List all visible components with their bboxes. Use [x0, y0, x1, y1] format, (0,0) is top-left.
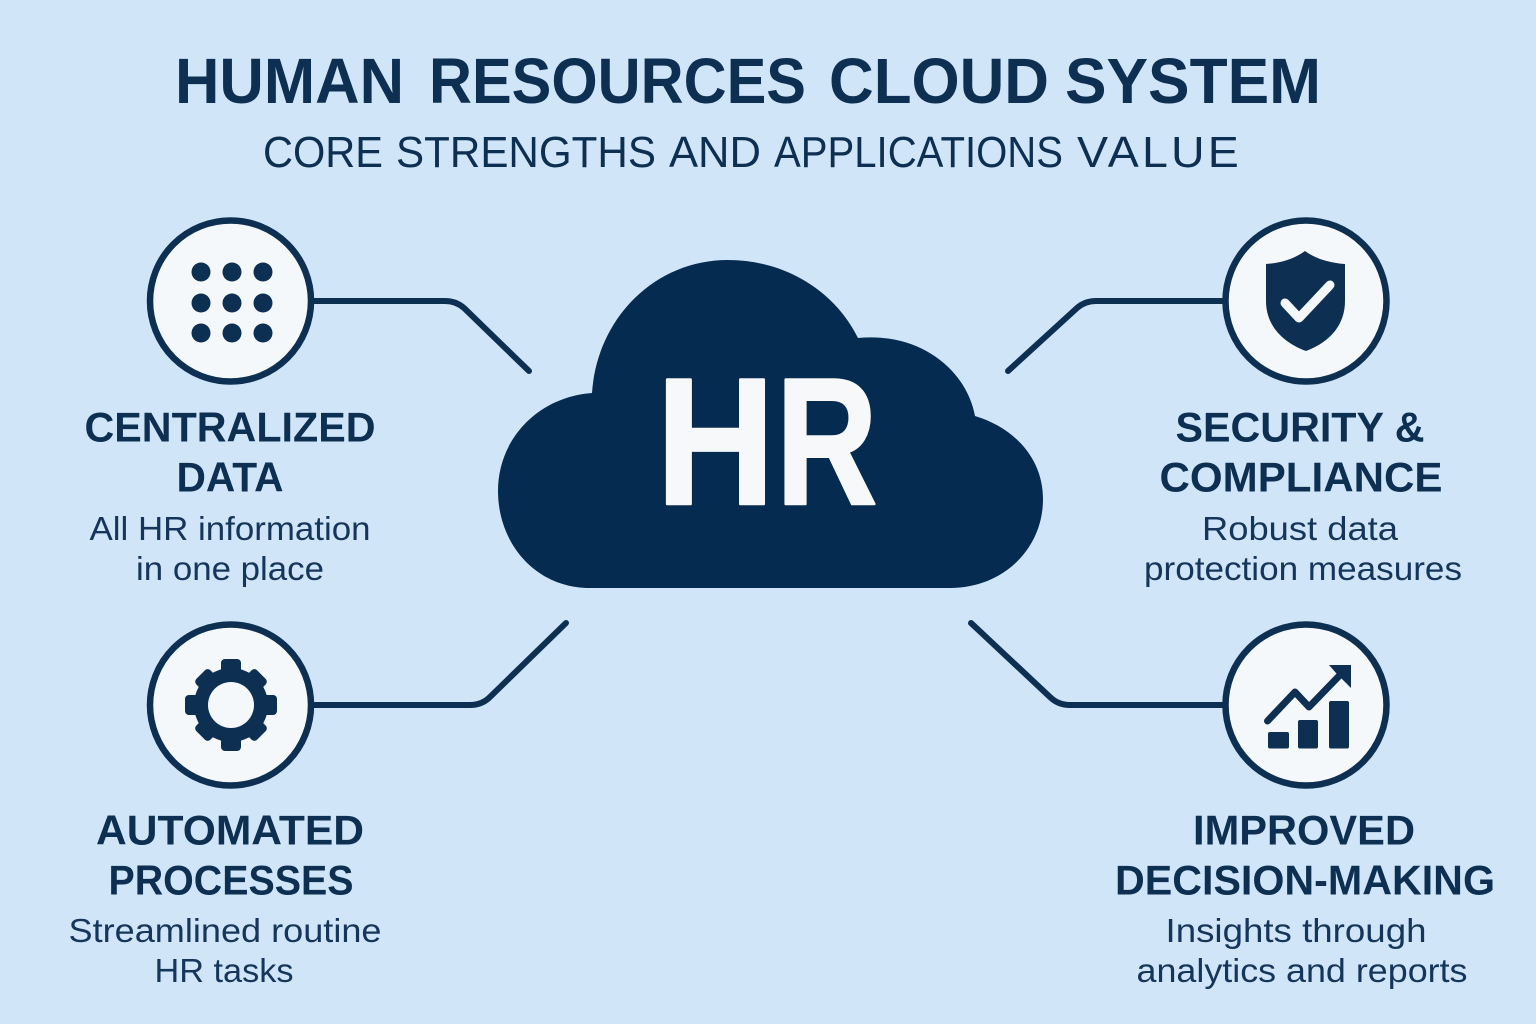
subtitle: APPLICATIONS: [774, 128, 1063, 177]
text: automated processes: HR tasks: [154, 953, 294, 990]
connector: automated: [312, 623, 566, 705]
title: CLOUD: [829, 45, 1049, 117]
text: improved decision-making: IMPROVED: [1193, 806, 1415, 854]
subtitle: CORE: [263, 128, 383, 177]
text: automated processes: Streamlined routine: [68, 913, 382, 950]
text: improved decision-making: Insights through: [1166, 913, 1426, 950]
text: automated processes: AUTOMATED: [96, 806, 364, 854]
text: automated processes: [68, 806, 382, 990]
cloud label: H: [656, 341, 775, 543]
cloud label: R: [776, 341, 878, 543]
subtitle: AND: [669, 128, 761, 177]
text: security and compliance: COMPLIANCE: [1160, 454, 1442, 500]
text: improved decision-making: [1115, 806, 1495, 990]
text: centralized data: CENTRALIZED: [84, 404, 376, 450]
text: security and compliance: protection measures: [1144, 551, 1462, 588]
icon: gear: [150, 624, 311, 786]
text: improved decision-making: DECISION-MAKING: [1115, 856, 1495, 904]
connector: decision making: [971, 623, 1224, 705]
text: centralized data: [84, 404, 376, 588]
icon: data grid: [150, 220, 311, 382]
icon: security shield: [1226, 220, 1386, 382]
text: centralized data: DATA: [176, 454, 284, 500]
connector: centralized data: [312, 301, 529, 371]
text: security and compliance: SECURITY &: [1176, 404, 1424, 450]
subtitle: VALUE: [1077, 128, 1242, 177]
text: improved decision-making: analytics and reports: [1136, 953, 1468, 990]
icon: analytics chart: [1226, 624, 1386, 786]
text: security and compliance: Robust data: [1202, 511, 1398, 548]
text: security and compliance: [1144, 404, 1462, 588]
title: SYSTEM: [1065, 45, 1321, 117]
subtitle: STRENGTHS: [396, 128, 656, 177]
text: centralized data: All HR information: [90, 511, 370, 548]
text: automated processes: PROCESSES: [108, 856, 354, 904]
title: HUMAN: [175, 45, 404, 117]
connector: security: [1008, 301, 1224, 371]
central cloud: [498, 260, 1043, 588]
text: centralized data: in one place: [136, 551, 324, 588]
title: RESOURCES: [429, 45, 806, 117]
